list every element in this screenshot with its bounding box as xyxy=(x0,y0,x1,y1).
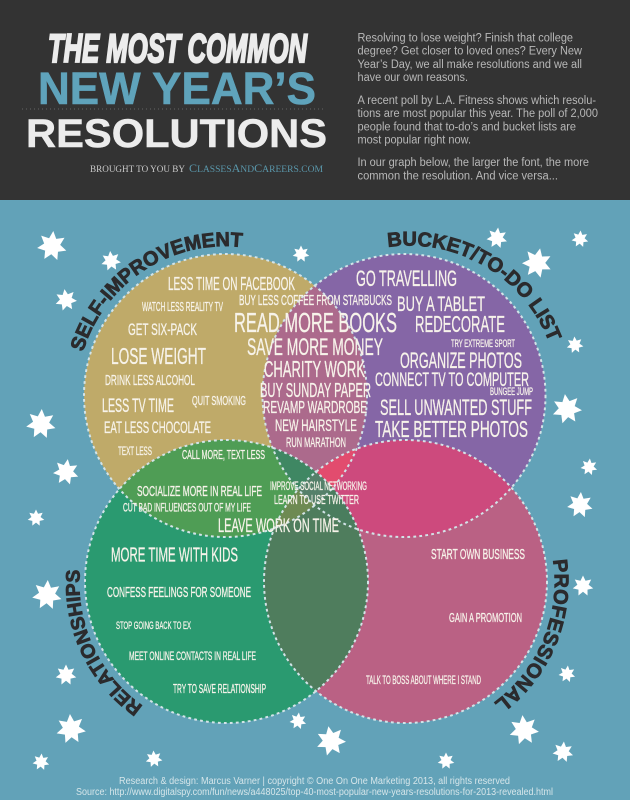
resolutions: self-improvement and bucket list overlap: NEW HAIRSTYLE xyxy=(275,416,357,435)
byline xyxy=(90,161,324,175)
byline: BROUGHT TO YOU BY xyxy=(90,164,185,174)
resolutions: self-improvement and bucket list overlap xyxy=(234,293,397,450)
label: self-improvement: SELF-IMPROVEMENT xyxy=(70,232,244,351)
footer credits xyxy=(76,776,553,798)
resolutions: relationships: CONFESS FEELINGS FOR SOMEONE xyxy=(107,585,251,601)
resolutions: bucket list: BUY A TABLET xyxy=(397,292,485,316)
resolutions: bucket list: REDECORATE xyxy=(415,311,505,337)
title: resolutions: RESOLUTIONS xyxy=(26,112,327,156)
resolutions: relationships: LEARN TO USE TWITTER xyxy=(274,493,359,507)
resolutions: relationships: CUT BAD INFLUENCES OUT OF MY LIFE xyxy=(123,500,251,514)
resolutions: relationships: CALL MORE, TEXT LESS xyxy=(182,447,265,462)
resolutions: relationships: LEAVE WORK ON TIME xyxy=(218,515,339,537)
intro paragraphs: A recent poll by L.A. Fitness shows which resolu- xyxy=(358,95,596,107)
resolutions: self-improvement and bucket list overlap: REVAMP WARDROBE xyxy=(263,397,367,417)
resolutions: relationships xyxy=(107,447,367,696)
intro paragraphs xyxy=(358,32,598,182)
intro paragraphs: Year’s Day, we all make resolutions and we all xyxy=(358,59,582,71)
resolutions: self-improvement xyxy=(102,273,295,458)
resolutions: self-improvement: LESS TV TIME xyxy=(102,395,174,417)
resolutions: self-improvement and bucket list overlap: SAVE MORE MONEY xyxy=(247,334,383,361)
resolutions: professional: TALK TO BOSS ABOUT WHERE I STAND xyxy=(366,675,481,687)
resolutions: self-improvement: WATCH LESS REALITY TV xyxy=(142,300,223,314)
intro paragraphs: have our own reasons. xyxy=(358,72,468,84)
resolutions: self-improvement: LESS TIME ON FACEBOOK xyxy=(168,273,295,294)
intro paragraphs: degree? Get closer to loved ones? Every New xyxy=(358,46,583,58)
resolutions: bucket list: GO TRAVELLING xyxy=(356,266,457,291)
resolutions: bucket list: TRY EXTREME SPORT xyxy=(451,338,515,350)
title: the most common: THE MOST COMMON xyxy=(48,27,308,71)
resolutions: self-improvement: QUIT SMOKING xyxy=(192,393,246,408)
footer credits: Research & design: Marcus Varner | copyright © One On One Marketing 2013, all rights reserved xyxy=(119,776,510,787)
resolutions: relationships: IMPROVE SOCIAL NETWORKING xyxy=(270,481,367,493)
title: new year's: NEW YEAR’S xyxy=(38,63,316,114)
resolutions: professional xyxy=(366,547,525,687)
resolutions: relationships: SOCIALIZE MORE IN REAL LIFE xyxy=(137,484,262,500)
resolutions: self-improvement: TEXT LESS xyxy=(118,444,152,458)
resolutions: self-improvement and bucket list overlap: BUY SUNDAY PAPER xyxy=(260,380,371,402)
intro paragraphs: people found that to-do’s and bucket lists are xyxy=(358,121,576,133)
resolutions: self-improvement and bucket list overlap: RUN MARATHON xyxy=(286,434,346,450)
label: bucket/to-do list: BUCKET/TO-DO LIST xyxy=(388,231,562,338)
resolutions: self-improvement: DRINK LESS ALCOHOL xyxy=(105,372,195,389)
resolutions: professional: START OWN BUSINESS xyxy=(431,547,525,563)
resolutions: self-improvement: LOSE WEIGHT xyxy=(111,343,206,369)
resolutions: bucket list: ORGANIZE PHOTOS xyxy=(400,348,522,373)
resolutions: relationships: MORE TIME WITH KIDS xyxy=(111,544,238,566)
resolutions: self-improvement: EAT LESS CHOCOLATE xyxy=(104,418,211,437)
resolutions: self-improvement and bucket list overlap: BUY LESS COFFEE FROM STARBUCKS xyxy=(239,293,392,309)
intro paragraphs: common the resolution. And vice versa... xyxy=(358,170,558,182)
resolutions: relationships: TRY TO SAVE RELATIONSHIP xyxy=(173,682,266,696)
resolutions: professional: GAIN A PROMOTION xyxy=(449,610,522,625)
footer credits: Source: http://www.digitalspy.com/fun/news/a448025/top-40-most-popular-new-years-resolutions-for-2013-revealed.html xyxy=(76,787,553,798)
intro paragraphs: Resolving to lose weight? Finish that college xyxy=(358,32,573,44)
intro paragraphs: In our graph below, the larger the font, the more xyxy=(358,157,589,169)
resolutions: relationships: MEET ONLINE CONTACTS IN REAL LIFE xyxy=(129,649,256,663)
resolutions: self-improvement and bucket list overlap: CHARITY WORK xyxy=(264,356,365,382)
resolutions: self-improvement: GET SIX-PACK xyxy=(128,320,197,339)
resolutions: self-improvement and bucket list overlap: READ MORE BOOKS xyxy=(234,307,397,338)
byline: CLASSESANDCAREERS.COM xyxy=(189,161,324,175)
intro paragraphs: tions are most popular this year. The poll of 2,000 xyxy=(358,108,598,120)
label: professional: PROFESSIONAL xyxy=(494,559,569,710)
stars xyxy=(26,226,598,770)
resolutions: bucket list xyxy=(356,266,533,442)
intro paragraphs: most popular right now. xyxy=(358,134,471,146)
header panel xyxy=(0,0,630,200)
venn diagram circles xyxy=(83,253,548,724)
resolutions: relationships: STOP GOING BACK TO EX xyxy=(116,620,191,632)
resolutions: bucket list: TAKE BETTER PHOTOS xyxy=(375,416,528,442)
label: relationships: RELATIONSHIPS xyxy=(66,570,142,716)
resolutions: bucket list: BUNGEE JUMP xyxy=(490,386,533,398)
